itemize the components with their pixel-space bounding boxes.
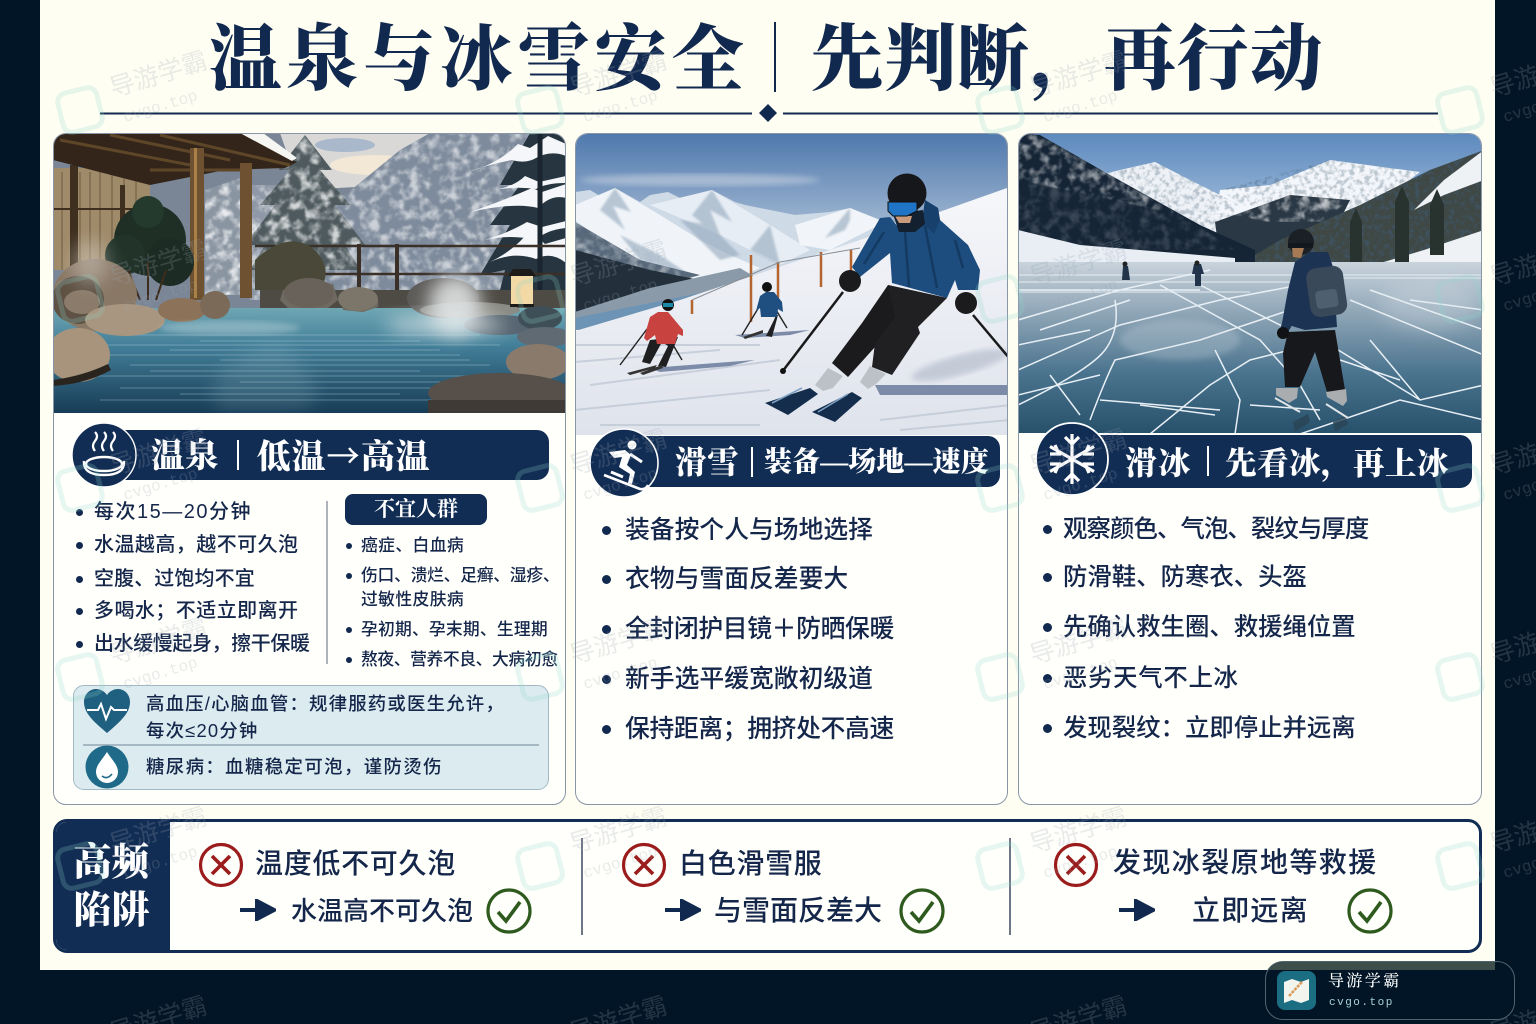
title separator	[774, 22, 776, 92]
list: hot spring tips	[76, 500, 310, 655]
title left part: 温泉与冰雪安全	[209, 20, 749, 100]
header bar	[101, 430, 549, 480]
header: skating	[1036, 422, 1472, 494]
icon: check	[1347, 888, 1393, 934]
traps label: 高频	[73, 842, 150, 884]
icon: skier	[590, 428, 659, 496]
list: hot spring tips: 出水缓慢起身，擦干保暖	[94, 633, 310, 655]
list: skating tips: 防滑鞋、防寒衣、头盔	[1063, 564, 1307, 591]
photo: skiers on slope	[576, 134, 1007, 435]
wrong statement: 白色滑雪服	[679, 848, 823, 879]
icon: check	[899, 888, 945, 934]
trap 1	[198, 842, 532, 934]
badge: not suitable: 不宜人群	[374, 497, 458, 521]
list: hot spring tips: 每次15—20分钟	[94, 501, 252, 523]
icon: map logo	[1277, 971, 1316, 1010]
title rule	[100, 104, 1438, 122]
header bar	[625, 436, 1000, 487]
traps label: 陷阱	[73, 890, 150, 932]
text: diabetes: 糖尿病：血糖稳定可泡，谨防烫伤	[146, 756, 443, 777]
trap 3	[1054, 842, 1393, 934]
header text: 滑雪	[675, 445, 739, 480]
icon: water drop	[86, 746, 128, 788]
icon: cross	[622, 842, 666, 888]
text: blood pressure: 高血压/心脑血管：规律服药或医生允许，	[146, 693, 505, 714]
list: skating tips: 恶劣天气不上冰	[1063, 665, 1239, 692]
list: unsuitable groups: 伤口、溃烂、足癣、湿疹、	[361, 566, 559, 585]
icon: cross	[198, 842, 244, 888]
header: hot spring	[72, 424, 549, 486]
list: skiing tips: 装备按个人与场地选择	[625, 517, 873, 544]
icon: arrow	[240, 899, 276, 921]
list: skating tips: 发现裂纹：立即停止并远离	[1063, 715, 1356, 742]
badge: not suitable	[345, 494, 487, 525]
list: hot spring tips: 多喝水；不适立即离开	[94, 600, 298, 622]
list: skating tips	[1043, 516, 1368, 742]
list: skating tips: 观察颜色、气泡、裂纹与厚度	[1063, 516, 1368, 543]
list: skiing tips	[602, 516, 894, 743]
icon: cross	[1054, 842, 1098, 888]
icon: arrow	[1119, 899, 1155, 921]
wrong statement: 温度低不可久泡	[255, 848, 456, 879]
list: skiing tips: 衣物与雪面反差要大	[625, 566, 848, 593]
panel: skiing	[575, 133, 1008, 805]
panel: hot spring	[53, 133, 566, 805]
correct statement: 与雪面反差大	[714, 895, 882, 926]
header bar	[1073, 435, 1472, 488]
list: unsuitable groups: 癌症、白血病	[361, 536, 464, 555]
panel: skating	[1018, 133, 1482, 805]
list: unsuitable groups: 过敏性皮肤病	[361, 590, 464, 609]
callout: health conditions	[73, 685, 549, 790]
header text: 温泉	[151, 438, 219, 475]
panel: common traps	[53, 819, 1482, 953]
list: skating tips: 先确认救生圈、救援绳位置	[1063, 614, 1356, 641]
photo: hot spring in snow	[54, 134, 565, 413]
header: hot spring: 低温→高温	[257, 429, 431, 478]
photo: skater on cracked ice	[1019, 134, 1481, 433]
list: unsuitable groups: 孕初期、孕末期、生理期	[361, 620, 548, 639]
wrong statement: 发现冰裂原地等救援	[1113, 847, 1378, 878]
list: skiing tips: 新手选平缓宽敞初级道	[625, 666, 873, 693]
list: skiing tips: 保持距离；拥挤处不高速	[625, 716, 894, 743]
header: skiing	[590, 428, 1000, 496]
header: skiing: 装备—场地—速度	[764, 447, 989, 478]
header: skating: 先看冰，再上冰	[1225, 446, 1449, 481]
title right part: 先判断，再行动	[811, 20, 1323, 100]
list: skiing tips: 全封闭护目镜＋防晒保暖	[625, 616, 894, 643]
callout: health conditions: 每次≤20分钟	[146, 720, 259, 741]
trap 2	[622, 842, 945, 934]
brand url: cvgo.top	[1329, 997, 1394, 1009]
list: unsuitable groups: 熬夜、营养不良、大病初愈	[361, 650, 558, 669]
traps label	[53, 819, 170, 953]
icon: check	[486, 888, 532, 934]
header text: 滑冰	[1125, 445, 1192, 481]
list: hot spring tips: 水温越高，越不可久泡	[94, 534, 298, 556]
icon: snowflake	[1036, 422, 1109, 494]
brand badge	[1265, 961, 1515, 1020]
brand name: 导游学霸	[1328, 973, 1402, 990]
icon: heart	[84, 689, 130, 733]
icon: arrow	[665, 899, 701, 921]
correct statement: 水温高不可久泡	[291, 896, 473, 926]
icon: steaming bath	[72, 424, 137, 486]
title	[100, 20, 1438, 122]
list: unsuitable groups	[346, 536, 559, 669]
correct statement: 立即远离	[1192, 895, 1309, 926]
list: hot spring tips: 空腹、过饱均不宜	[94, 568, 255, 590]
